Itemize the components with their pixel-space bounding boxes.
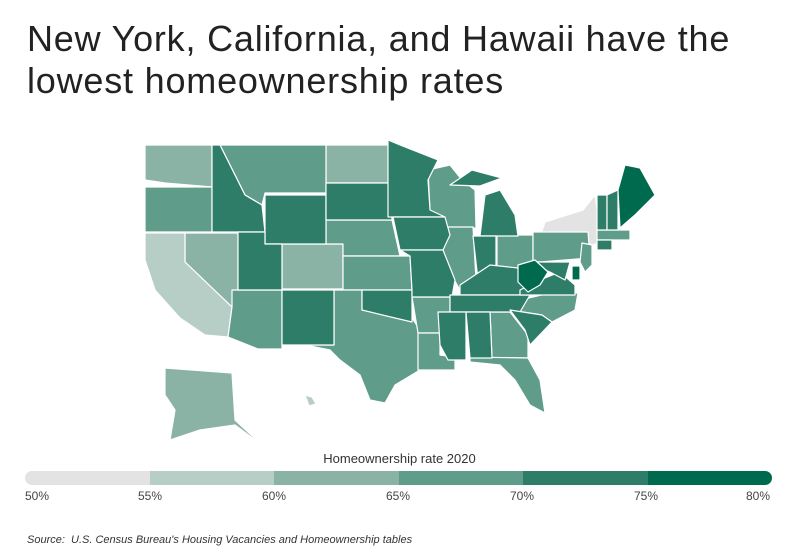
text: 70% — [510, 489, 534, 503]
title: lowest homeownership rates — [27, 60, 504, 101]
title — [27, 18, 730, 101]
legend labels — [25, 489, 770, 503]
legend title: Homeownership rate 2020 — [323, 451, 476, 466]
text: 60% — [262, 489, 286, 503]
legend bar — [25, 471, 772, 485]
text: 65% — [386, 489, 410, 503]
NY — [538, 195, 600, 245]
text: 55% — [138, 489, 162, 503]
source: Source: U.S. Census Bureau's Housing Vacancies and Homeownership tables — [27, 534, 412, 546]
CA — [145, 233, 232, 337]
text: 75% — [634, 489, 658, 503]
text: 50% — [25, 489, 49, 503]
text: 80% — [746, 489, 770, 503]
title: New York, California, and Hawaii have the — [27, 18, 730, 59]
